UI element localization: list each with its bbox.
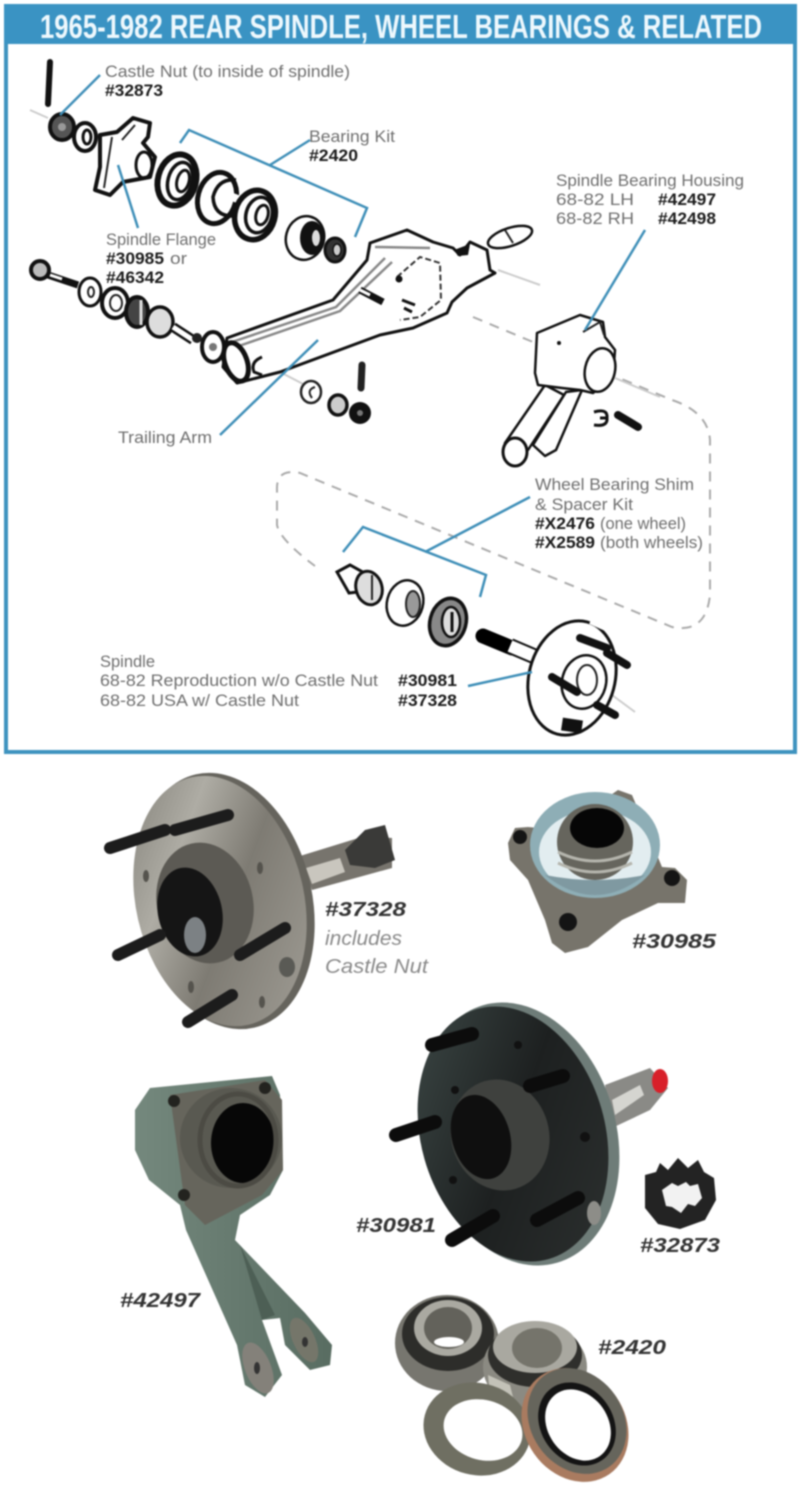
label: spindle: Spindle [100,652,155,671]
label: spindle: #30981 [398,671,457,690]
photo: castle nut 32873 [645,1158,716,1229]
label: shim and spacer kit: & Spacer Kit [535,495,633,514]
illustration: small plug [485,221,535,253]
panel: exploded parts diagram [4,4,797,752]
dashed assembly guide lines [30,110,710,712]
label: bearing kit: #2420 [309,146,358,165]
label: shim and spacer kit: #X2476 [535,514,595,533]
label: shim and spacer kit: (both wheels) [600,533,703,552]
label: trailing arm: Trailing Arm [118,428,212,447]
photo: spindle 37328 [110,755,395,1047]
label: spindle bearing housing: 68-82 LH [556,190,634,209]
label: bearing kit: Bearing Kit [309,127,395,146]
label: spindle bearing housing: 68-82 RH [556,209,634,228]
label: castle nut [105,62,350,100]
leader lines [60,75,645,686]
caption: 42497: #42497 [120,1290,201,1312]
label: spindle: #37328 [398,691,457,710]
label: spindle flange: #30985 [106,249,164,268]
caption: 2420: #2420 [598,1337,666,1359]
label: spindle bearing housing [556,171,744,228]
caption: 37328 [325,899,430,978]
label: shim and spacer kit: (one wheel) [600,514,686,533]
caption: 37328: Castle Nut [325,956,430,978]
illustration: spindle bearing housing [503,315,619,466]
label: bearing kit [309,127,395,165]
caption: 32873: #32873 [640,1235,720,1257]
label: shim and spacer kit: Wheel Bearing Shim [535,475,694,494]
illustration: lower bolts and nuts [301,365,371,424]
illustration: pivot bolt stack [31,261,224,362]
illustration: trailing arm [219,230,495,385]
caption: 37328: #37328 [325,899,407,921]
photo: spindle 30981 [389,979,668,1289]
label: spindle bearing housing: #42497 [658,190,716,209]
photo: spindle bearing housing 42497 [135,1076,332,1398]
photo: bearing kit 2420 [395,1295,650,1493]
illustration: castle nut [50,114,74,140]
label: spindle bearing housing: #42498 [658,209,716,228]
illustration: bearing set [152,150,345,264]
label: spindle: 68-82 Reproduction w/o Castle Nut [100,671,378,690]
label: spindle flange: or [170,249,187,268]
caption: 30981: #30981 [356,1215,436,1237]
illustration: housing washer and bolt [594,411,638,427]
label: shim and spacer kit [535,475,703,552]
photo: spindle flange 30985 [508,790,687,953]
illustration: washer [74,123,96,151]
label: castle nut: #32873 [105,81,163,100]
illustration: spindle flange [95,118,155,195]
label: castle nut: Castle Nut (to inside of spindle) [105,62,350,81]
label: spindle flange: #46342 [106,268,164,287]
illustration: cotter pin [48,62,50,104]
illustration: shim and spacer parts [337,565,472,650]
label: spindle: 68-82 USA w/ Castle Nut [100,691,299,710]
label: spindle [100,652,457,710]
label: spindle flange [106,230,216,287]
label: shim and spacer kit: #X2589 [535,533,595,552]
caption: 37328: includes [325,928,402,950]
caption: 30985: #30985 [632,931,717,953]
label: spindle bearing housing: Spindle Bearing Housing [556,171,744,190]
label: spindle flange: Spindle Flange [106,230,216,249]
illustration: spindle and hub [483,611,629,745]
